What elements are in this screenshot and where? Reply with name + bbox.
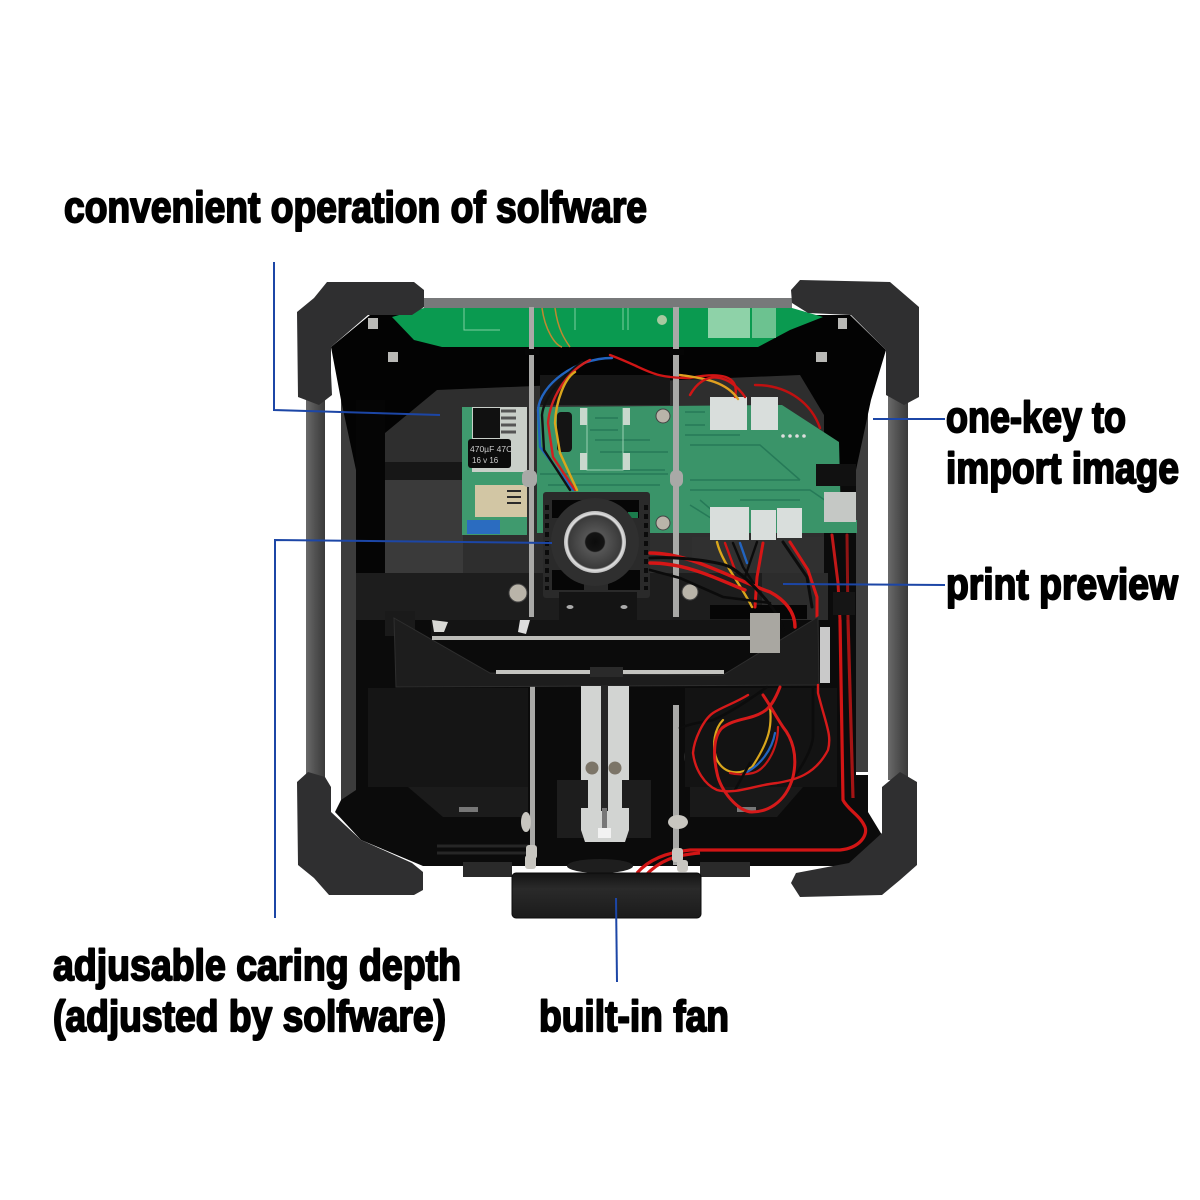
built-in fan — [512, 873, 701, 918]
chip and capacitor — [468, 408, 572, 468]
rear wall panel — [385, 375, 824, 573]
callout line: import image — [873, 418, 945, 420]
chip and capacitor: 16 v 16 — [472, 456, 499, 465]
lower wall — [368, 688, 837, 853]
power jack — [816, 464, 856, 486]
foam corner top left — [297, 282, 424, 405]
label: adjustable carving depth — [53, 941, 461, 1041]
callout line: carving depth — [275, 540, 552, 918]
carriage mount — [559, 592, 637, 640]
label: adjustable carving depth: (adjusted by solfware) — [53, 992, 446, 1041]
lower rod nuts — [521, 812, 688, 872]
vertical rods — [522, 307, 684, 865]
label: built-in fan: built-in fan — [539, 992, 729, 1041]
callout line: fan — [616, 898, 617, 982]
foam corner bottom left — [297, 772, 423, 895]
callout line: print preview — [783, 584, 945, 585]
main red power cable — [637, 620, 866, 876]
SD module — [824, 492, 856, 522]
main circuit board — [462, 405, 857, 535]
chip and capacitor: 470µF 47C — [470, 444, 512, 454]
laser lens — [564, 511, 626, 573]
loose wire loops — [680, 685, 829, 812]
top crossbar — [424, 298, 792, 308]
top green circuit board — [392, 308, 823, 347]
label: one-key import: one-key to — [946, 393, 1126, 442]
outer frame legs — [306, 383, 908, 808]
foam corner top right — [791, 280, 919, 405]
X carriage frame — [385, 611, 830, 687]
laser wires — [650, 553, 795, 630]
interior body — [331, 315, 886, 866]
Z slider with lead screw — [557, 686, 651, 842]
laser module heat sink — [543, 492, 650, 598]
foam corner bottom right — [791, 772, 917, 897]
label: one-key import — [946, 393, 1179, 493]
lower band — [356, 573, 828, 620]
left dark column — [356, 400, 385, 573]
memory card slot — [475, 485, 527, 517]
rear fan housing tabs — [463, 859, 750, 877]
blue trimmer — [467, 520, 500, 534]
callout line: software — [274, 262, 440, 415]
product photo: engraver interior — [297, 280, 919, 918]
screws — [509, 409, 699, 769]
white connectors — [710, 397, 802, 540]
wire clip — [833, 592, 855, 615]
mounting nuts — [368, 318, 847, 362]
label: convenient operation: convenient operation of solfware — [64, 183, 647, 232]
upper wires — [538, 355, 848, 620]
label: adjustable carving depth: adjusable caring depth — [53, 941, 461, 990]
